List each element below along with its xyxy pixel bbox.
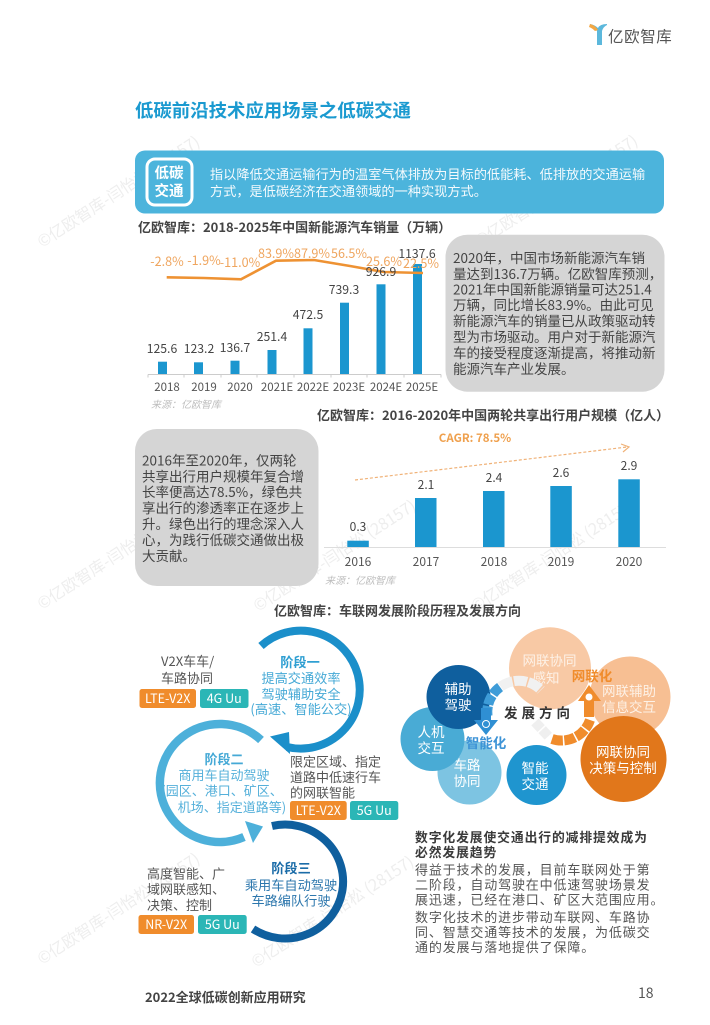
bar chart: shared mobility users: 2017 (413, 553, 440, 570)
bar chart: shared mobility users: 2.1 (418, 476, 434, 493)
logo: 亿欧智库 (608, 25, 672, 47)
direction ring (487, 681, 590, 741)
bar chart: EV sales: 739.3 (329, 280, 359, 298)
text: ©亿欧智库-闫怡松 (28157) (32, 846, 204, 969)
bar chart: EV sales: 1137.6 (398, 244, 436, 262)
bar chart: EV sales: 2022E (297, 379, 329, 395)
source note: 来源：亿欧智库 (325, 572, 397, 587)
bar chart: EV sales: 87.9% (294, 243, 330, 262)
bar chart: EV sales: 926.9 (366, 262, 396, 280)
text block: digital emissions trend: 得益于技术的发展，目前车联网处于第 (415, 860, 650, 878)
panel: stage three: 阶段三 (271, 858, 311, 877)
bar chart: EV sales: 125.6 (147, 339, 177, 357)
node: 网联辅助信息交互: 信息交互 (602, 696, 656, 716)
node: 网联协同决策与控制 (580, 716, 666, 802)
panel: EV sales commentary: 2020年，中国市场新能源汽车销 (453, 247, 645, 267)
node: 车路协同 (438, 740, 502, 804)
bar chart: EV sales: 2018 (154, 379, 180, 395)
badge: 5G Uu (350, 800, 398, 820)
bar chart: EV sales: -2.8% (150, 251, 184, 270)
node: 人机交互 (400, 707, 464, 771)
bar chart: shared mobility users: 2020 (616, 553, 643, 570)
bar chart: EV sales: 25.6% (366, 251, 402, 270)
bar chart: EV sales: 136.7 (220, 338, 250, 356)
bar chart: EV sales: -11.0% (220, 252, 261, 271)
text block: digital emissions trend: 同、智慧交通等技术的发展，为低碳交 (415, 922, 650, 941)
bar chart: EV sales: -1.9% (187, 250, 221, 269)
node: 智能交通 (506, 745, 566, 805)
panel: EV sales commentary: 万辆，同比增长83.9%。由此可见 (453, 294, 654, 314)
panel: stage one: 车路协同 (161, 668, 213, 687)
source note: 来源：亿欧智库 (151, 396, 223, 411)
bar chart: EV sales: 2024E (370, 379, 402, 395)
text block: digital emissions trend: 数字化发展使交通出行的减排提效成为 (415, 827, 648, 846)
diagram: development directions (400, 627, 670, 805)
node: 网联协同决策与控制: 决策与控制 (589, 757, 657, 777)
text: ©亿欧智库-闫怡松 (28157) (466, 493, 638, 616)
panel: EV sales commentary: 量达到136.7万辆。亿欧智库预测， (453, 263, 662, 283)
text: ©亿欧智库-闫怡松 (28157) (248, 493, 420, 616)
bar chart: EV sales: 2021E (261, 379, 293, 395)
panel: stage three: 决策、控制 (147, 895, 212, 914)
text: ©亿欧智库-闫怡松 (28157) (32, 491, 204, 614)
label: 智能化: 智能化 (466, 732, 507, 752)
definition text: 方式，是低碳经济在交通领域的一种实现方式。 (210, 181, 487, 200)
arrow: stage one arc (261, 631, 360, 754)
bar chart: EV sales: 2025E (406, 379, 438, 395)
bar chart: shared mobility users: 2018 (481, 553, 508, 570)
badge: LTE-V2X: LTE-V2X (145, 688, 190, 707)
node: 网联协同感知: 网联协同 (522, 650, 576, 670)
badge: 4G Uu (200, 688, 248, 708)
panel: stage three (138, 825, 343, 939)
panel: stage two (160, 724, 398, 843)
panel: shared mobility commentary: 心，为践行低碳交通做出极 (142, 529, 304, 549)
panel: shared mobility commentary: 大贡献。 (142, 545, 196, 565)
node: 人机交互: 交互 (418, 737, 444, 757)
panel: stage one: 驾驶辅助安全 (261, 684, 341, 703)
node: 网联协同感知: 感知 (532, 667, 560, 687)
bar chart: EV sales: 123.2 (184, 339, 214, 357)
title: 低碳前沿技术应用场景之低碳交通 (135, 97, 411, 123)
definition text: 指以降低交通运输行为的温室气体排放为目标的低能耗、低排放的交通运输 (210, 164, 645, 183)
label: 发展方向: 发展方向 (504, 702, 574, 722)
arrow: intelligence (474, 708, 498, 735)
badge: 5G Uu: 5G Uu (357, 800, 392, 819)
badge: NR-V2X: NR-V2X (145, 914, 187, 933)
panel: EV sales commentary: 型为市场驱动。用户对于新能源汽 (453, 326, 656, 346)
node: 车路协同: 车路 (454, 754, 481, 774)
panel: shared mobility commentary: 长率便高达78.5%，绿色共 (142, 481, 302, 501)
badge: 5G Uu (198, 914, 247, 934)
node: 辅助驾驶: 辅助 (444, 678, 472, 698)
panel: EV sales commentary: 2021年中国新能源销量可达251.4 (453, 278, 652, 298)
bar chart: EV sales: 2023E (333, 379, 365, 395)
definition text (210, 164, 645, 200)
heading: EV sales chart: 亿欧智库：2018-2025年中国新能源汽车销量（万辆） (138, 217, 451, 236)
bar chart: shared mobility users: 0.3 (350, 518, 366, 535)
node: 网联辅助信息交互 (590, 656, 670, 738)
panel: stage two: 道路中低速行车 (290, 767, 381, 786)
node: 网联辅助信息交互: 网联辅助 (602, 680, 656, 700)
arrow: stage two arc (160, 724, 263, 843)
badge: 4G Uu: 4G Uu (207, 688, 242, 707)
text block: digital emissions trend: 必然发展趋势 (415, 842, 497, 861)
node: 人机交互: 人机 (418, 721, 445, 741)
panel: stage three: 域网联感知、 (147, 879, 225, 898)
arrow: CAGR trend (355, 444, 629, 480)
node: 辅助驾驶: 驾驶 (444, 694, 472, 714)
node: 辅助驾驶 (426, 665, 490, 729)
panel: EV sales commentary: 车的接受程度逐渐提高，将推动新 (453, 342, 656, 362)
icon: low-carbon traffic badge: 低碳 (154, 162, 184, 183)
panel: stage two: 阶段二 (204, 749, 244, 768)
arrow: connectivity (578, 685, 601, 717)
bar chart: shared mobility users (324, 430, 666, 570)
node: 智能交通: 交通 (522, 773, 549, 793)
footer: report name: 2022全球低碳创新应用研究 (145, 987, 306, 1006)
bar chart: EV sales: 2019 (191, 379, 217, 395)
bar chart: EV sales: 251.4 (257, 327, 287, 345)
bar chart: shared mobility users: 2019 (548, 553, 574, 570)
node: 网联协同感知 (509, 627, 591, 709)
panel: stage two: 商用车自动驾驶 (178, 765, 270, 784)
footer: page number: 18 (638, 983, 654, 1003)
panel: shared mobility commentary: 2016年至2020年，仅两轮 (142, 450, 296, 470)
icon: low-carbon traffic badge: 交通 (154, 180, 184, 201)
text block: digital emissions trend (415, 827, 664, 956)
panel: stage two: 机场、指定道路等) (178, 797, 286, 816)
bar chart: EV sales: 2020 (227, 379, 253, 395)
panel: stage three: 乘用车自动驾驶 (245, 875, 337, 894)
icon: low-carbon traffic badge (147, 159, 192, 205)
panel: stage one: (高速、智能公交) (250, 699, 352, 718)
panel: stage two: 的网联智能 (290, 782, 355, 802)
bar chart: EV sales: 472.5 (293, 305, 323, 323)
panel: stage one (140, 631, 360, 754)
text block: digital emissions trend: 通的发展与落地提供了保障。 (415, 937, 595, 956)
label: 网联化: 网联化 (572, 665, 613, 685)
text block: digital emissions trend: 展迅速，已经在港口、矿区大范围应用。 (415, 890, 664, 908)
panel: shared mobility commentary: 共享出行用户规模年复合增 (142, 466, 304, 486)
node: 网联协同决策与控制: 网联协同 (596, 741, 650, 761)
panel: EV sales commentary: 能源汽车产业发展。 (453, 358, 574, 378)
panel: stage two: 限定区域、指定 (290, 752, 381, 770)
bar chart: shared mobility users: 2.9 (621, 457, 637, 474)
heading: shared mobility chart: 亿欧智库：2016-2020年中国两轮共享出行用户规模（亿人） (317, 405, 669, 424)
line: growth rate (167, 260, 423, 279)
arrow: stage three arc (253, 825, 343, 939)
CAGR label: CAGR: 78.5% (439, 430, 511, 446)
panel: stage one: V2X车车/ (161, 651, 214, 670)
text: ©亿欧智库-闫怡松 (28157) (470, 128, 642, 251)
panel: shared mobility commentary (135, 429, 318, 586)
panel: stage three: 车路编队行驶 (251, 890, 331, 910)
bar chart: shared mobility users: 2.6 (553, 464, 570, 481)
bar chart: EV sales: 56.5% (331, 243, 367, 262)
text block: digital emissions trend: 数字化技术的进步带动车联网、车路协 (415, 907, 650, 926)
badge: LTE-V2X: LTE-V2X (296, 800, 341, 819)
panel: shared mobility commentary: 享出行的渗透率正在逐步上 (142, 497, 304, 517)
node: 智能交通: 智能 (522, 757, 548, 777)
panel: stage one: 阶段一 (280, 652, 320, 671)
panel: EV sales commentary (446, 235, 664, 392)
panel: shared mobility commentary: 升。绿色出行的理念深入人 (142, 513, 304, 533)
badge: 5G Uu: 5G Uu (205, 914, 240, 933)
heading: connected vehicle stages: 亿欧智库：车联网发展阶段历程及发展方向 (274, 600, 521, 620)
text block: digital emissions trend: 二阶段，自动驾驶在中低速驾驶场景发 (415, 874, 650, 894)
text: ©亿欧智库-闫怡松 (28157) (246, 849, 418, 972)
bar chart: EV sales: 22.5% (403, 253, 439, 272)
bar chart: shared mobility users: 2.4 (486, 469, 503, 486)
bar chart: shared mobility users: 2016 (345, 553, 372, 570)
bar chart: EV sales (147, 243, 441, 395)
panel: EV sales commentary: 新能源汽车的销量已从政策驱动转 (453, 310, 656, 330)
panel: stage two: (园区、港口、矿区、 (161, 780, 283, 800)
panel: stage one: 提高交通效率 (261, 668, 341, 687)
panel: definition banner (135, 150, 664, 214)
node: 车路协同: 协同 (454, 770, 480, 790)
text: ©亿欧智库-闫怡松 (28157) (32, 129, 204, 252)
bar chart: EV sales: 83.9% (258, 243, 294, 262)
panel: stage three: 高度智能、广 (147, 864, 225, 882)
